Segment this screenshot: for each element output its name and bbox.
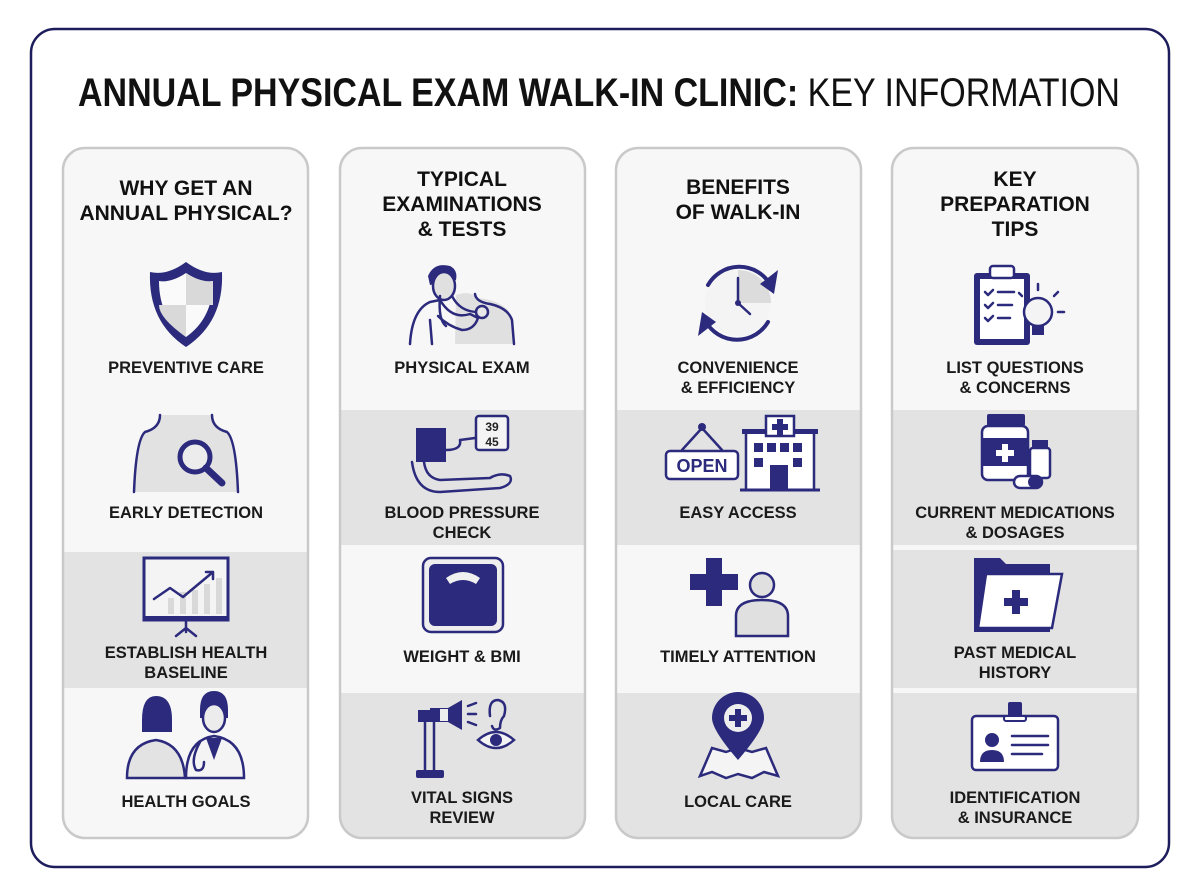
panel: why get an annual physical bbox=[63, 148, 308, 838]
icon: id card bbox=[972, 702, 1058, 770]
icon: blood pressure bbox=[412, 416, 511, 492]
label: physical exam: PHYSICAL EXAM bbox=[394, 359, 530, 377]
label: vital signs review: REVIEW bbox=[429, 809, 495, 827]
label: preventive care: PREVENTIVE CARE bbox=[108, 359, 264, 377]
icon: blood pressure: 39 bbox=[485, 420, 499, 434]
label: list questions & concerns: & CONCERNS bbox=[960, 379, 1070, 397]
heading: key preparation tips: PREPARATION bbox=[940, 193, 1090, 216]
label: health goals: HEALTH GOALS bbox=[122, 793, 250, 811]
icon: open sign and hospital: OPEN bbox=[676, 456, 728, 476]
panel: key preparation tips bbox=[892, 148, 1138, 843]
icon: monitor chart bbox=[144, 558, 228, 636]
heading: typical examinations: & TESTS bbox=[418, 218, 506, 241]
label: weight & bmi: WEIGHT & BMI bbox=[403, 648, 521, 666]
icon: cross and person bbox=[690, 558, 788, 636]
label: establish health baseline: BASELINE bbox=[144, 664, 228, 682]
icon: physical exam bbox=[410, 265, 514, 344]
label: vital signs review: VITAL SIGNS bbox=[411, 789, 513, 807]
icon: blood pressure: 45 bbox=[485, 435, 499, 449]
label: identification & insurance: & INSURANCE bbox=[958, 809, 1072, 827]
heading: why: WHY GET AN bbox=[119, 177, 253, 200]
label: local care: LOCAL CARE bbox=[684, 793, 792, 811]
label: past medical history: PAST MEDICAL bbox=[954, 644, 1076, 662]
panel: typical examinations & tests bbox=[340, 148, 585, 843]
icon: patient and doctor bbox=[127, 691, 244, 778]
label: list questions & concerns: LIST QUESTIONS bbox=[946, 359, 1084, 377]
label: convenience & efficiency: CONVENIENCE bbox=[677, 359, 799, 377]
label: establish health baseline: ESTABLISH HEALTH bbox=[105, 644, 267, 662]
title: ANNUAL PHYSICAL EXAM WALK-IN CLINIC: KEY INFORMATION bbox=[78, 71, 1120, 115]
icon: scale bbox=[423, 558, 503, 632]
heading: key preparation tips: KEY bbox=[993, 168, 1037, 191]
icon: clock with arrows bbox=[698, 267, 778, 340]
icon: medication bottles bbox=[982, 414, 1050, 488]
icon: shield bbox=[150, 262, 222, 347]
label: early detection: EARLY DETECTION bbox=[109, 504, 263, 522]
label: blood pressure check: BLOOD PRESSURE bbox=[385, 504, 539, 522]
label: identification & insurance: IDENTIFICATION bbox=[950, 789, 1080, 807]
heading: key preparation tips: TIPS bbox=[992, 218, 1038, 241]
label: blood pressure check: CHECK bbox=[433, 524, 491, 542]
icon: vital signs bbox=[416, 700, 514, 778]
label: timely attention: TIMELY ATTENTION bbox=[660, 648, 816, 666]
heading: typical examinations: TYPICAL bbox=[417, 168, 507, 191]
icon: map pin bbox=[700, 692, 778, 778]
icon: torso with magnifier bbox=[134, 415, 238, 492]
label: current medications & dosages: CURRENT MEDICATIONS bbox=[915, 504, 1115, 522]
icon: medical folder bbox=[974, 558, 1062, 632]
icon: clipboard and bulb bbox=[974, 266, 1064, 345]
heading: benefits: BENEFITS bbox=[686, 176, 790, 199]
panel: benefits of walk-in bbox=[616, 148, 861, 843]
heading: why: ANNUAL PHYSICAL? bbox=[79, 202, 293, 225]
heading: typical examinations: EXAMINATIONS bbox=[382, 193, 542, 216]
icon: open sign and hospital bbox=[666, 416, 820, 490]
label: easy access: EASY ACCESS bbox=[679, 504, 797, 522]
label: past medical history: HISTORY bbox=[979, 664, 1051, 682]
label: convenience & efficiency: & EFFICIENCY bbox=[681, 379, 795, 397]
label: current medications & dosages: & DOSAGES bbox=[965, 524, 1065, 542]
heading: benefits: OF WALK-IN bbox=[676, 201, 800, 224]
